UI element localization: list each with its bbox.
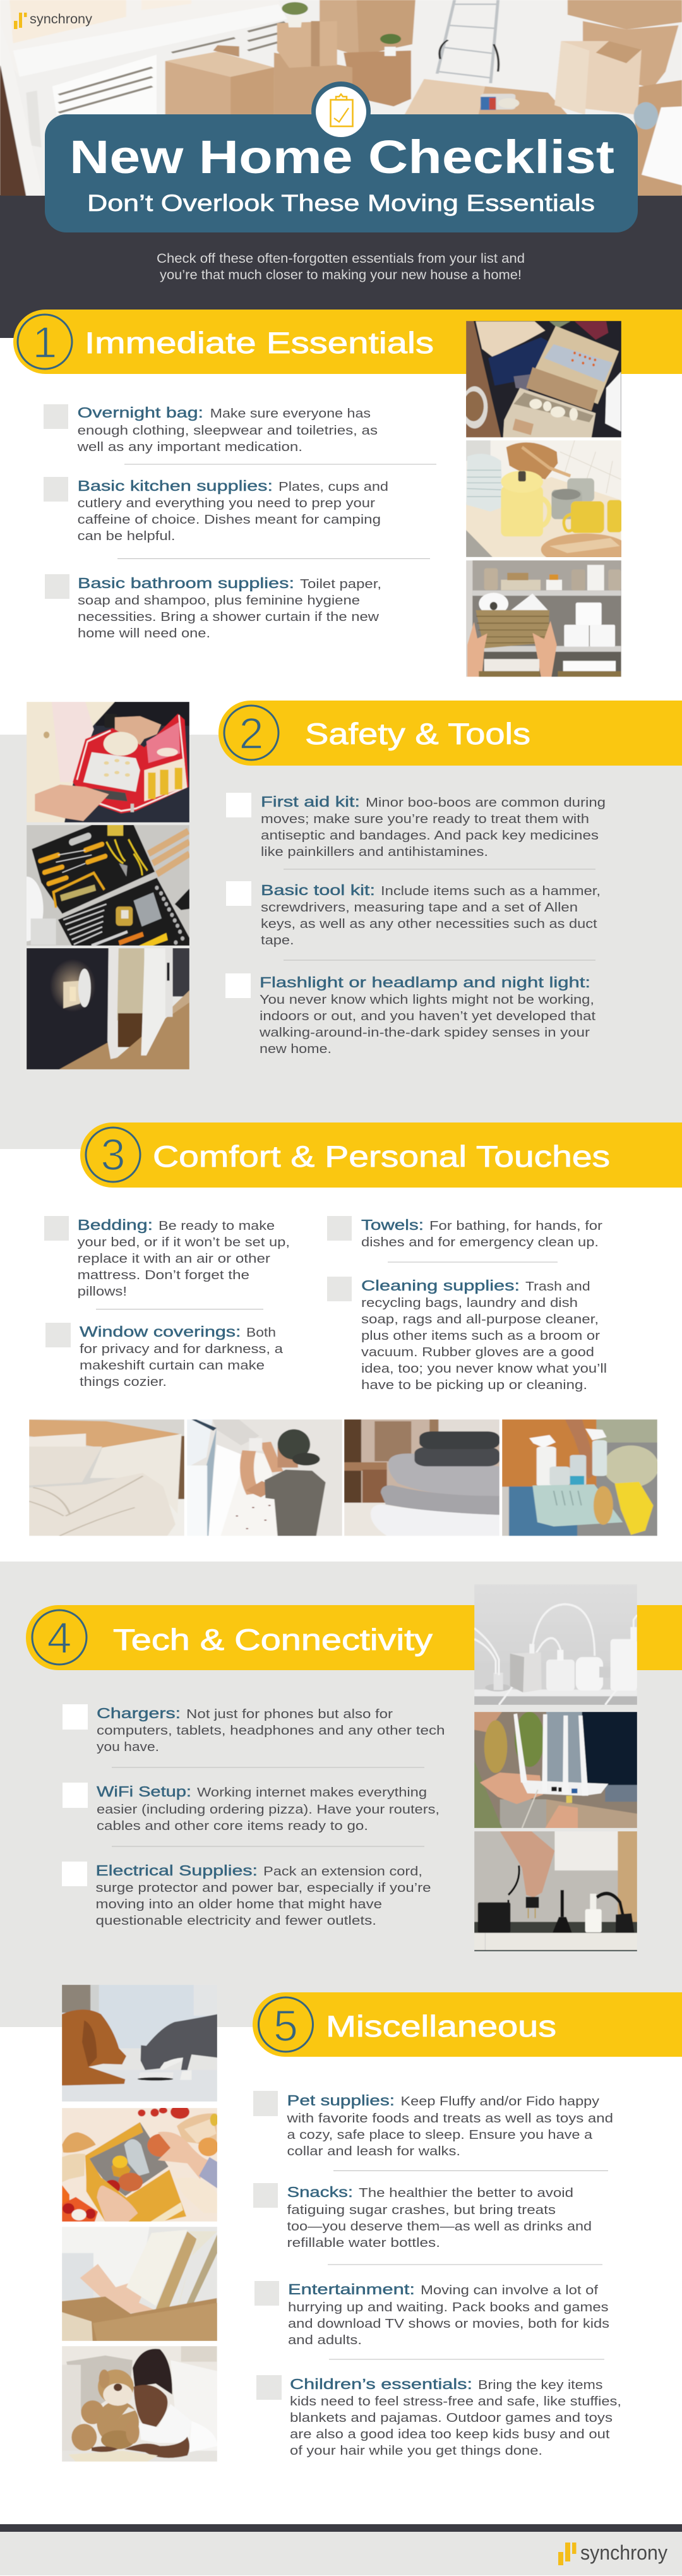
item: flashlight and night light [225,973,596,1056]
section 1 header: Immediate Essentials: 1 [33,318,57,367]
item: window coverings: Both [246,1326,276,1340]
photo: tool kit [27,825,189,946]
photo: stacked towels [344,1419,500,1536]
photo: kitchen dishes [466,440,621,557]
checklist: miscellaneous [253,2091,621,2458]
item: children's essentials: blankets and pajamas. Outdoor games and toys [290,2411,613,2425]
item: bedding: replace it with an air or other [78,1252,270,1266]
item: window coverings: for privacy and for darkness, a [80,1342,284,1356]
item: flashlight and night light: new home. [260,1042,332,1056]
item: overnight bag: well as any important medication. [76,440,302,454]
item: flashlight and night light: You never know which lights might not be working, [260,993,594,1007]
item: children's essentials [256,2375,621,2458]
intro text: Check off these often-forgotten essentials from your list and [157,251,525,266]
item: chargers [63,1704,445,1754]
item: snacks: The healthier the better to avoid [359,2186,573,2200]
item: first aid kit: First aid kit: [261,793,360,810]
item: basic tool kit: Basic tool kit: [261,882,375,898]
item: basic tool kit: screwdrivers, measuring tape and a set of Allen [261,901,578,915]
item: basic bathroom supplies: necessities. Bring a shower curtain if the new [78,610,380,624]
item: overnight bag [44,404,378,454]
section 4 header: Tech & Connectivity [26,1605,682,1670]
section 2 header: Safety & Tools [218,701,682,766]
item: basic kitchen supplies: cutlery and everything you need to prep your [78,497,375,510]
item: overnight bag: Overnight bag: [78,404,203,421]
item: children's essentials: are also a good idea too keep kids busy and out [290,2428,610,2441]
item: entertainment: Moving can involve a lot of [421,2284,599,2297]
section 2 header: Safety & Tools: Safety & Tools [305,717,530,750]
section 2 header: Safety & Tools: 2 [239,709,263,758]
footer band with logo [0,2524,682,2575]
item: bedding [44,1216,290,1299]
photo: bedding [29,1419,184,1536]
item: first aid kit: antiseptic and bandages. And pack key medicines [261,829,599,843]
item: electrical supplies: Pack an extension cord, [263,1865,422,1879]
item: snacks: refillable water bottles. [287,2236,440,2250]
item: towels: Towels: [361,1217,424,1233]
photo: snack bag [62,2108,217,2222]
item: towels: For bathing, for hands, for [429,1219,602,1233]
item: pet supplies: with favorite foods and treats as well as toys and [286,2112,613,2126]
item: basic bathroom supplies: Basic bathroom supplies: [78,575,294,591]
photo: overnight toiletry bag [466,321,621,437]
item: wifi setup [63,1783,440,1833]
checklist: safety and tools [225,793,606,1056]
hero photo: moving boxes in a room [0,0,682,196]
item: pet supplies: collar and leash for walks. [287,2145,460,2158]
checklist: comfort and personal touches [44,1216,607,1392]
item: children's essentials: Bring the key items [478,2378,602,2392]
section 1 header: Immediate Essentials [13,310,682,374]
item: bedding: pillows! [78,1285,127,1299]
item: bedding: Be ready to make [159,1219,275,1233]
item: basic tool kit: keys, as well as any other necessities such as duct [261,917,597,931]
item: cleaning supplies: recycling bags, laundry and dish [361,1296,578,1310]
item: basic bathroom supplies: Toilet paper, [300,577,381,591]
section 5 header: Miscellaneous [253,1992,682,2057]
item: wifi setup: cables and other core items ready to go. [97,1819,368,1833]
photo: hanging a curtain [187,1419,342,1536]
item: first aid kit: like painkillers and antihistamines. [261,845,488,859]
photo: cleaning supplies caddy [502,1419,657,1536]
photo: dog and cat [62,1985,217,2102]
item: chargers: Chargers: [97,1705,181,1721]
item: flashlight and night light: Flashlight or headlamp and night light: [260,974,590,990]
item: chargers: you have. [97,1740,159,1754]
photo: first aid kit [27,702,189,822]
item: cleaning supplies: vacuum. Rubber gloves are a good [361,1345,594,1359]
checklist: immediate essentials [44,404,436,641]
item: first aid kit: Minor boo-boos are common during [366,796,606,810]
intro text: you’re that much closer to making your new house a home! [160,268,522,282]
item: children's essentials: kids need to feel stress-free and safe, like stuffies, [290,2395,621,2409]
item: wifi setup: WiFi Setup: [97,1783,191,1800]
item: flashlight and night light: indoors or out, and you haven’t yet developed that [260,1009,596,1023]
item: chargers: computers, tablets, headphones and any other tech [97,1724,445,1738]
photo: packing books [62,2227,217,2341]
item: basic kitchen supplies [44,477,388,543]
item: bedding: mattress. Don’t forget the [78,1268,249,1282]
item: pet supplies: Keep Fluffy and/or Fido happy [400,2095,599,2109]
item: pet supplies: a cozy, safe place to sleep. Ensure you have a [287,2128,593,2142]
item: wifi setup: Working internet makes everything [197,1786,427,1800]
item: overnight bag: enough clothing, sleepwear and toiletries, as [78,424,378,438]
item: cleaning supplies: have to be picking up or cleaning. [361,1378,587,1392]
photo: router [474,1712,637,1828]
intro text [157,251,525,282]
item: basic kitchen supplies: can be helpful. [78,529,175,543]
item: chargers: Not just for phones but also for [186,1707,393,1721]
title banner [45,81,638,232]
item: wifi setup: easier (including ordering pizza). Have your routers, [97,1803,440,1817]
item: electrical supplies: Electrical Supplies: [96,1862,258,1879]
item: snacks: fatiguing sugar crashes, but bring treats [287,2203,556,2217]
main title: New Home Checklist [69,131,614,183]
section 4 header: Tech & Connectivity: 4 [47,1613,71,1663]
item: snacks [253,2183,592,2250]
item: cleaning supplies [327,1277,607,1392]
item: cleaning supplies: Cleaning supplies: [361,1277,520,1294]
item: electrical supplies: questionable electricity and fewer outlets. [96,1914,376,1928]
item: first aid kit [226,793,606,859]
item: basic bathroom supplies: soap and shampoo, plus feminine hygiene [78,594,360,608]
item: window coverings: makeshift curtain can make [80,1359,265,1373]
item: cleaning supplies: soap, rags and all-purpose cleaner, [361,1313,599,1327]
item: cleaning supplies: Trash and [525,1280,590,1294]
item: bedding: your bed, or if it won’t be set up, [78,1236,290,1249]
logo: synchrony footer: synchrony [580,2541,667,2564]
item: basic kitchen supplies: Basic kitchen supplies: [78,478,273,494]
item: first aid kit: moves; make sure you’re ready to treat them with [261,812,589,826]
item: children's essentials: Children’s essentials: [290,2376,472,2392]
item: cleaning supplies: plus other items such as a broom or [361,1329,600,1343]
item: basic tool kit: tape. [261,934,294,948]
item: basic bathroom supplies: home will need one. [78,627,210,641]
section 3 header: Comfort & Personal Touches: 3 [101,1130,125,1179]
section 3 header: Comfort & Personal Touches: Comfort & Personal Touches [153,1140,610,1173]
item: electrical supplies: moving into an older home that might have [96,1898,382,1911]
item: towels: dishes and for emergency clean up. [361,1236,599,1249]
item: bedding: Bedding: [78,1217,153,1233]
item: basic tool kit: Include items such as a hammer, [381,884,601,898]
item: basic kitchen supplies: caffeine of choice. Dishes meant for camping [78,513,381,527]
logo: synchrony top [14,12,93,29]
item: entertainment: Entertainment: [288,2281,415,2297]
subtitle: Don’t Overlook These Moving Essentials [87,190,595,216]
item: towels [327,1216,602,1249]
item: cleaning supplies: idea, too; you never know what you’ll [361,1362,607,1376]
item: snacks: too—you deserve them—as well as drinks and [287,2220,592,2234]
section 4 header: Tech & Connectivity: Tech & Connectivity [113,1623,433,1656]
photo: child reading with teddy bear [62,2346,217,2462]
item: electrical supplies: surge protector and power bar, especially if you’re [96,1881,431,1895]
item: window coverings [45,1323,284,1389]
checklist: tech and connectivity [62,1704,445,1928]
item: window coverings: things cozier. [80,1375,167,1389]
icon: clipboard checklist [316,87,366,137]
item: entertainment [254,2281,609,2347]
item: snacks: Snacks: [287,2184,353,2200]
item: overnight bag: Make sure everyone has [210,407,371,421]
item: flashlight and night light: walking-around-in-the-dark spidey senses in your [259,1026,590,1040]
section 5 header: Miscellaneous: Miscellaneous [326,2009,556,2043]
item: entertainment: hurrying up and waiting. Pack books and games [288,2301,609,2314]
item: electrical supplies [62,1862,431,1928]
photo: night light on wall [27,948,189,1069]
section 3 header: Comfort & Personal Touches [80,1122,682,1188]
photo: plugs in power strip [474,1831,637,1951]
item: basic bathroom supplies [45,574,381,641]
section 1 header: Immediate Essentials: Immediate Essentials [85,326,434,359]
photo: chargers in power strip [474,1586,637,1705]
item: basic kitchen supplies: Plates, cups and [278,480,388,494]
item: window coverings: Window coverings: [80,1323,241,1340]
item: entertainment: and adults. [288,2333,362,2347]
logo: synchrony top: synchrony [30,12,93,27]
item: basic tool kit [226,881,601,948]
section 5 header: Miscellaneous: 5 [273,2001,298,2050]
photo: bathroom shelf with basket [466,560,621,677]
item: pet supplies: Pet supplies: [287,2092,395,2109]
item: children's essentials: of your hair while you get things done. [290,2444,542,2458]
item: entertainment: and download TV shows or movies, both for kids [288,2317,609,2331]
item: pet supplies [253,2091,613,2158]
